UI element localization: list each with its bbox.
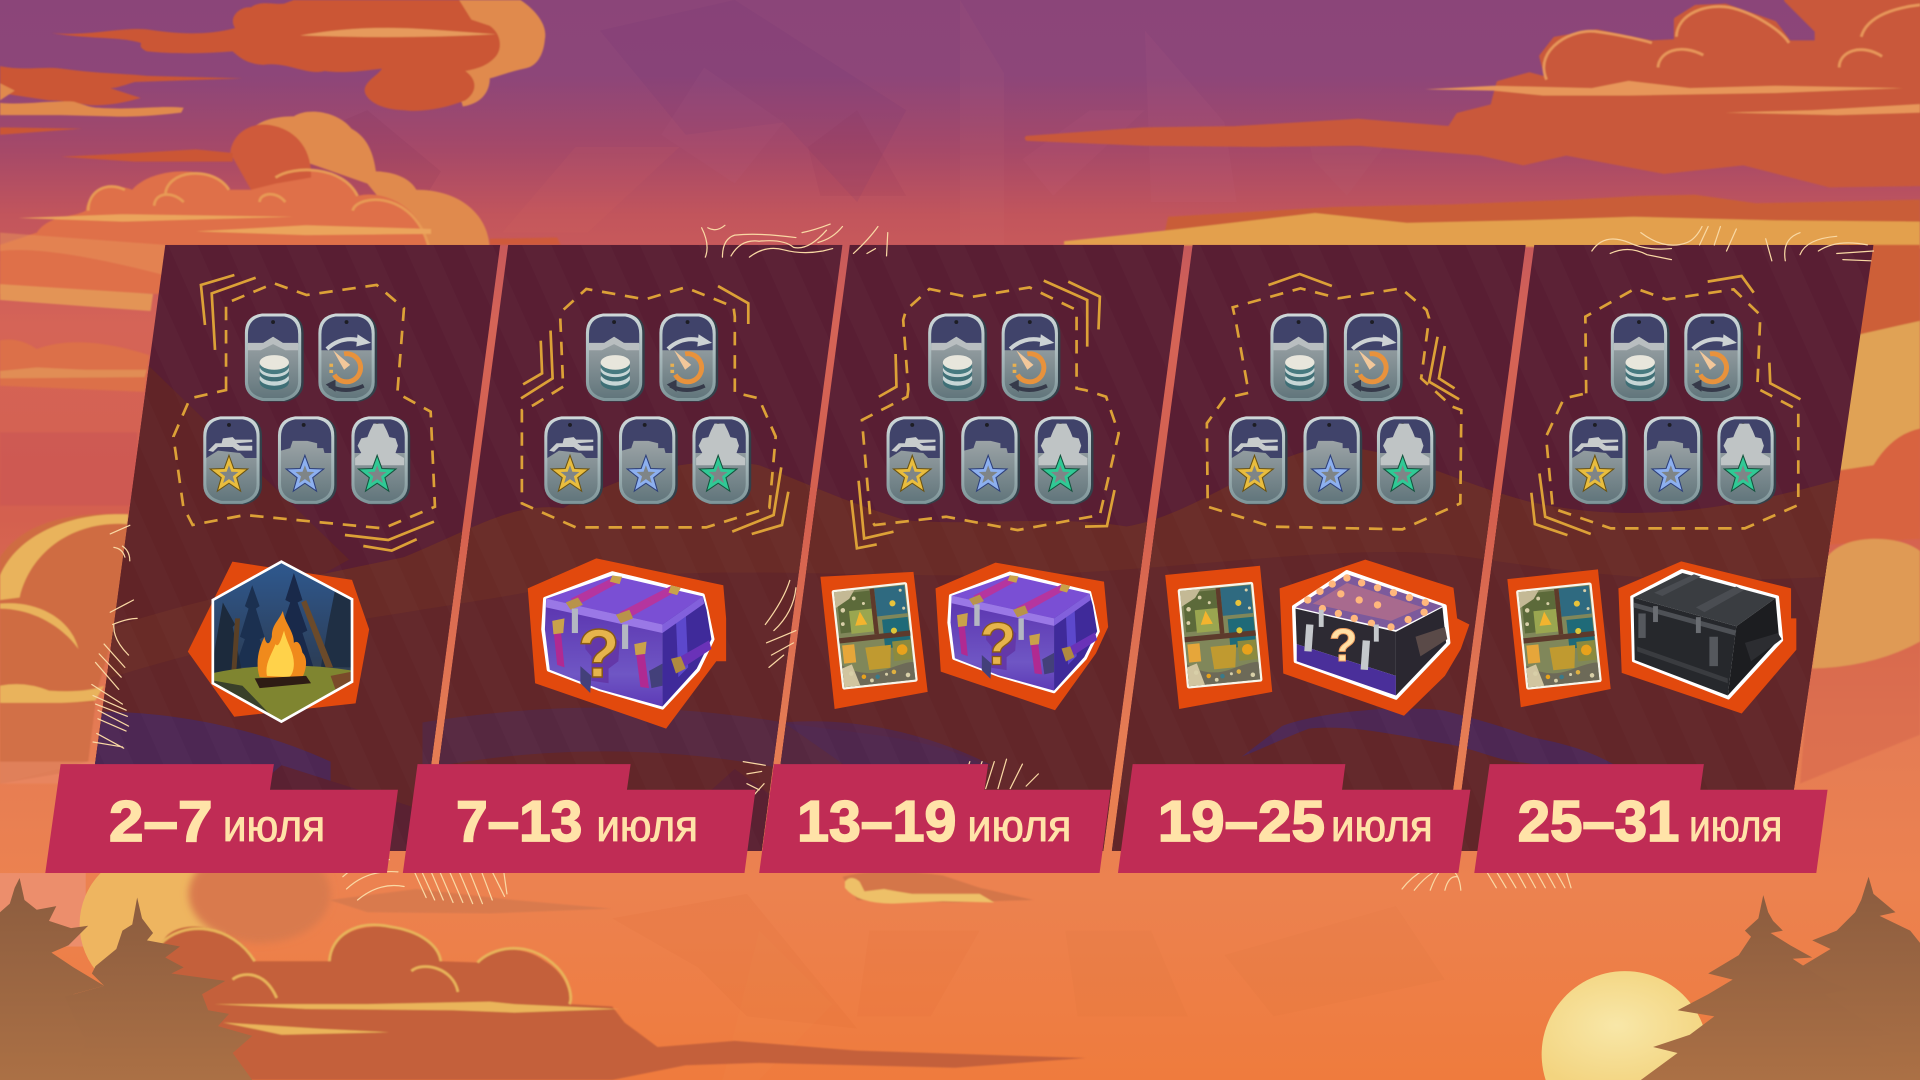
trees: left: [0, 878, 252, 1080]
medals row: [544, 313, 751, 504]
date banner: 19–25 июля: [1118, 764, 1470, 873]
reward: neon chest: [1280, 560, 1469, 716]
panel: 19–25 июля: [1112, 244, 1526, 851]
medals row: [1569, 313, 1776, 504]
trees: right: [1641, 877, 1920, 1080]
month text: июля: [967, 802, 1071, 851]
left bottom moon glow: [0, 845, 612, 998]
month text: июля: [1331, 802, 1433, 851]
accent chevrons: [851, 281, 1115, 548]
panel background: [438, 245, 842, 851]
background geometric facets: [282, 0, 1445, 1080]
reward: purple chest: [936, 563, 1108, 710]
cloud: top left: [0, 0, 545, 135]
dashed outline: [862, 287, 1119, 530]
panel: 13–19 июля: [780, 244, 1184, 851]
date banner: 2–7 июля: [45, 764, 398, 873]
medals row: [887, 313, 1093, 504]
date banner: 7–13 июля: [403, 764, 756, 873]
reward: map card: [820, 572, 928, 709]
cloud: upper left with peach edge: [0, 112, 561, 294]
cloud: bottom small: [842, 872, 1033, 904]
reward: map card: [1507, 569, 1611, 707]
month text: июля: [596, 802, 698, 851]
accent chevrons: [521, 286, 788, 534]
panel background: [95, 244, 500, 851]
dashed outline: [173, 283, 435, 528]
cloud: top right: [1027, 0, 1920, 185]
month text: июля: [1689, 802, 1782, 851]
reward: black chest: [1618, 561, 1796, 714]
accent chevrons: [201, 275, 434, 551]
scratch marks: [92, 224, 1873, 904]
dashed outline: [522, 287, 776, 527]
date text: 7–13: [456, 790, 582, 854]
reward: map card: [1165, 566, 1272, 709]
date text: 19–25: [1158, 790, 1325, 854]
cloud: bottom left: [159, 925, 1086, 1080]
medals row: [1229, 313, 1436, 504]
bands left of panels: [0, 233, 165, 506]
reward: neon chest: ?: [1329, 619, 1357, 671]
date text: 25–31: [1518, 790, 1679, 854]
accent chevrons: [1531, 276, 1800, 535]
moon: [1542, 971, 1708, 1080]
date text: 2–7: [109, 790, 212, 854]
date banner: 25–31 июля: [1474, 764, 1828, 873]
dashed outline: [1207, 288, 1461, 529]
panel: 7–13 июля: [438, 245, 842, 851]
date text: 13–19: [797, 790, 956, 854]
panel: 2–7 июля: [95, 244, 500, 851]
accent chevrons: [1268, 274, 1459, 399]
dashed outline: [1546, 288, 1798, 528]
date banner: 13–19 июля: [759, 764, 1111, 873]
panel background: [1112, 244, 1526, 851]
cloud: right side: [1800, 245, 1920, 784]
panel background: [780, 244, 1184, 851]
cloud streak: right band: [1064, 195, 1920, 249]
cloud: left with yellow crescent: [0, 514, 129, 784]
month text: июля: [223, 802, 325, 851]
reward: campfire token: [188, 557, 369, 729]
medals row: [203, 313, 410, 504]
panel: 25–31 июля: [1462, 244, 1874, 851]
panel background: [1462, 244, 1874, 851]
reward: purple chest: [528, 558, 726, 729]
